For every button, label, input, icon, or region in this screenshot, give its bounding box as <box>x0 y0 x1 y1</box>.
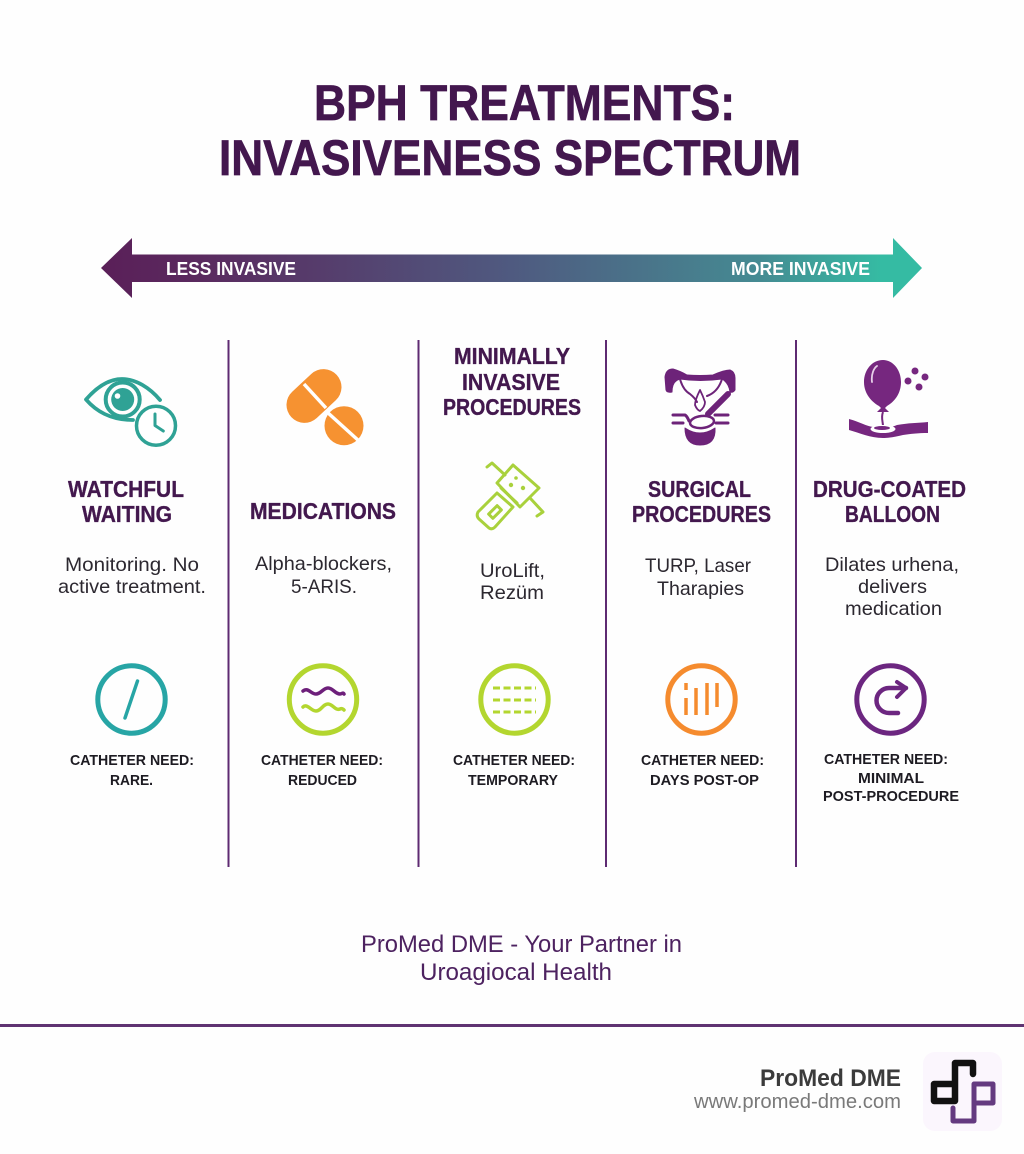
arrow: invasiveness spectrum: LESS INVASIVE <box>166 259 296 279</box>
heading: drug-coated balloon <box>813 476 966 527</box>
description: surgical procedures: Tharapies <box>657 578 744 600</box>
icon: dashed lines ring <box>481 666 548 733</box>
catheter need: temporary <box>453 752 575 789</box>
icon: surgical anatomy <box>665 369 735 445</box>
description: medications: 5-ARIS. <box>291 576 357 598</box>
icon: slash ring <box>98 666 165 733</box>
footer brand text <box>693 1065 901 1113</box>
arrow: invasiveness spectrum <box>101 238 922 298</box>
heading: minimally invasive procedures <box>443 343 581 420</box>
tagline: Uroagiocal Health <box>420 959 612 986</box>
heading: watchful waiting: WAITING <box>82 501 172 527</box>
arrow: invasiveness spectrum: MORE INVASIVE <box>731 259 870 279</box>
title: BPH TREATMENTS: <box>314 75 735 131</box>
catheter need: reduced: CATHETER NEED: <box>261 752 383 769</box>
heading: medications: MEDICATIONS <box>250 498 396 524</box>
icon: device <box>477 463 543 529</box>
description: watchful waiting <box>58 554 206 598</box>
tagline: ProMed DME - Your Partner in <box>361 931 682 958</box>
panel: watchful waiting <box>58 379 206 789</box>
catheter need: reduced <box>261 752 383 789</box>
description: medications: Alpha-blockers, <box>255 553 392 575</box>
heading: watchful waiting: WATCHFUL <box>68 476 184 502</box>
heading: minimally invasive procedures: INVASIVE <box>462 369 560 395</box>
heading: watchful waiting <box>68 476 184 527</box>
description: drug-coated balloon: delivers <box>858 576 927 598</box>
catheter need: temporary: CATHETER NEED: <box>453 752 575 769</box>
heading: drug-coated balloon: DRUG-COATED <box>813 476 966 502</box>
description: surgical procedures <box>645 555 751 600</box>
catheter need: minimal post-procedure: MINIMAL <box>858 770 924 787</box>
logo <box>923 1052 1002 1131</box>
icon: pills <box>279 362 364 445</box>
description: drug-coated balloon: Dilates urhena, <box>825 554 959 576</box>
footer brand text: ProMed DME <box>760 1065 901 1092</box>
heading: surgical procedures: SURGICAL <box>648 476 751 502</box>
catheter need: rare: RARE. <box>110 772 153 789</box>
catheter need: reduced: REDUCED <box>288 772 357 789</box>
description: watchful waiting: Monitoring. No <box>65 554 199 576</box>
description: medications <box>255 553 392 598</box>
footer brand text: www.promed-dme.com <box>693 1091 901 1113</box>
heading: drug-coated balloon: BALLOON <box>845 501 940 527</box>
description: minimally invasive procedures: UroLift, <box>480 560 545 582</box>
catheter need: rare <box>70 752 194 789</box>
catheter need: minimal post-procedure: POST-PROCEDURE <box>823 788 959 805</box>
title <box>219 75 801 186</box>
heading: minimally invasive procedures: PROCEDURES <box>443 394 581 420</box>
icon: balloon <box>849 360 928 438</box>
description: minimally invasive procedures <box>480 560 545 604</box>
description: watchful waiting: active treatment. <box>58 576 206 598</box>
heading: surgical procedures <box>632 476 771 527</box>
catheter need: temporary: TEMPORARY <box>468 772 558 789</box>
catheter need: rare: CATHETER NEED: <box>70 752 194 769</box>
panel: surgical procedures <box>632 369 771 789</box>
heading: surgical procedures: PROCEDURES <box>632 501 771 527</box>
catheter need: days post-op <box>641 752 764 789</box>
title: INVASIVENESS SPECTRUM <box>219 130 801 186</box>
icon: eye and clock <box>86 379 176 445</box>
catheter need: minimal post-procedure: CATHETER NEED: <box>824 751 948 768</box>
panel: drug-coated balloon <box>813 360 966 805</box>
icon: waves ring <box>289 666 357 733</box>
description: surgical procedures: TURP, Laser <box>645 555 751 577</box>
catheter need: days post-op: DAYS POST-OP <box>650 772 759 789</box>
panel: minimally invasive procedures <box>443 343 581 789</box>
description: drug-coated balloon: medication <box>845 598 942 620</box>
description: minimally invasive procedures: Rezüm <box>480 582 544 604</box>
catheter need: days post-op: CATHETER NEED: <box>641 752 764 769</box>
icon: bars ring <box>668 666 735 733</box>
heading: minimally invasive procedures: MINIMALLY <box>454 343 570 369</box>
tagline <box>361 931 682 986</box>
panel: medications <box>250 362 396 789</box>
catheter need: minimal post-procedure <box>823 751 959 805</box>
icon: return arrow ring <box>857 666 924 733</box>
description: drug-coated balloon <box>825 554 959 620</box>
